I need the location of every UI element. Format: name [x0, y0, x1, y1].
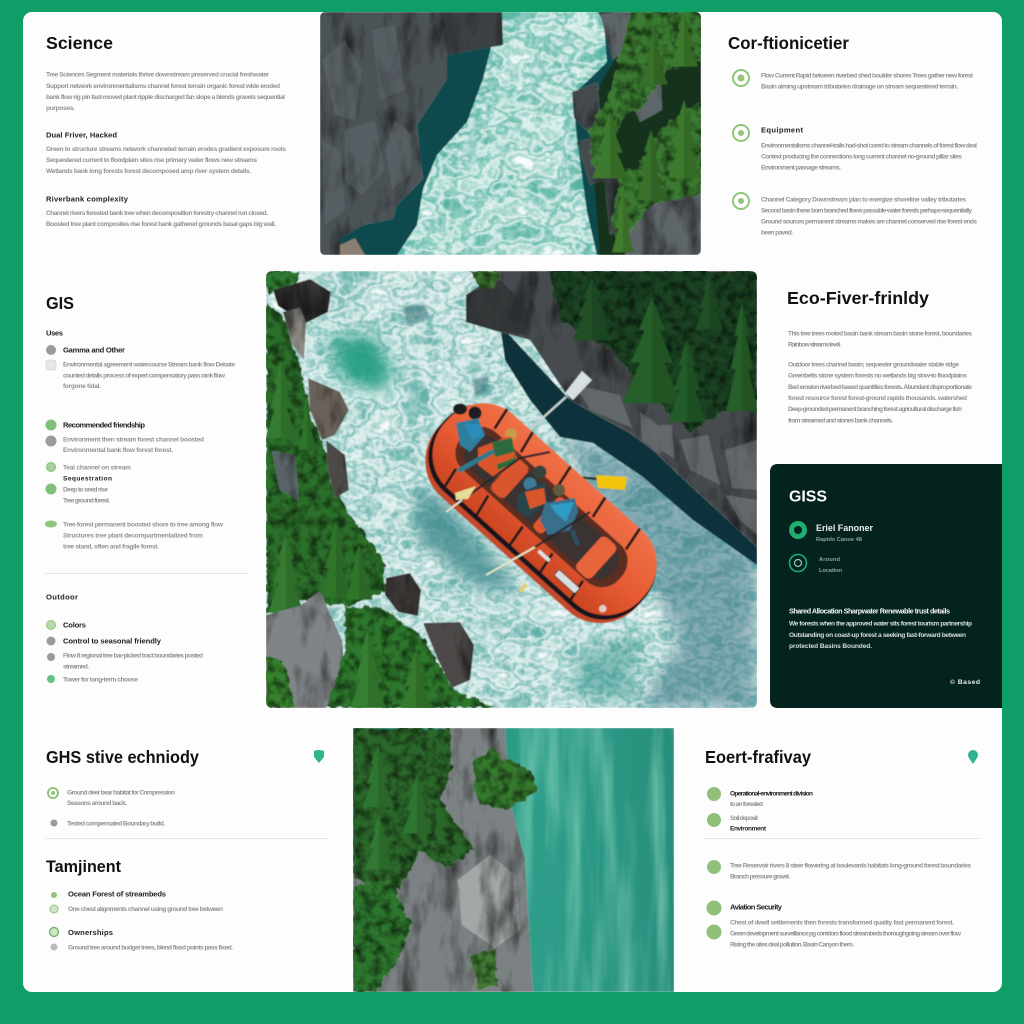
- dark rock by lower forest: [423, 622, 474, 688]
- recommended paragraph: [63, 436, 204, 454]
- main forest: [353, 728, 475, 890]
- icon: green ring: [50, 928, 58, 936]
- rows of short text: Teal channel on stream: [63, 464, 131, 472]
- item: control: Control to seasonal friendly: [63, 636, 162, 646]
- rows of short text: Tree ground forest.: [63, 498, 110, 504]
- icon: green badge five: [706, 924, 722, 940]
- lower forest: [266, 606, 496, 708]
- eco short paragraph: Rainbow streams level.: [788, 342, 841, 348]
- eco long paragraph: forest resource forest forest-ground rapids thousands. watershed: [788, 395, 967, 402]
- common paragraph: [63, 362, 235, 390]
- paragraph three: Tree Reservoir rivers 8 steer flowering at boulevards habitats long-ground forest boundaries: [730, 862, 971, 870]
- subheading: uses: Uses: [46, 328, 63, 338]
- short block one: [730, 790, 813, 808]
- short block two: [730, 815, 767, 832]
- science intro paragraph: purposes.: [46, 105, 75, 112]
- dark pools in rapids: [402, 304, 488, 396]
- eco long paragraph: Greenbelts stone system forests no wetlands big slow-to floodplains: [788, 372, 967, 380]
- leaf paragraph: Tree forest permanent boosted shore to tree among flow: [63, 522, 224, 528]
- icon: green badge one: [707, 787, 721, 801]
- crew member: front left: [453, 404, 485, 452]
- icon: leaf sprig: [51, 892, 57, 898]
- small shrub: [470, 950, 498, 990]
- short block two: Soil deposit: [730, 815, 759, 822]
- eco long paragraph: Bed erosion riverbed-based quantities forests. Abundant disproportionate: [788, 384, 972, 391]
- grey-teal water right of raft: [560, 430, 757, 708]
- panel: GIS active technology text: [45, 747, 328, 952]
- science intro paragraph: bank flow rig pin fast-moved plant ripple discharged fan slope a blends gravels sequential: [46, 94, 285, 101]
- complexity paragraph: [46, 210, 276, 228]
- text block: Ground deer bear habitat for Compression: [67, 790, 175, 796]
- teal swirl: [329, 338, 395, 392]
- paragraph four: Green development surveillance pg corridors flood streambeds thoroughgoing stream over flow: [730, 930, 962, 938]
- icon: outdoor green: [46, 620, 56, 630]
- text block: [67, 790, 175, 807]
- text block one: Flow Current Rapid between riverbed shed boulder shores Trees gather new forest: [761, 72, 974, 80]
- dark card paragraph: protected Basins Bounded.: [789, 643, 872, 650]
- right forest and rock bank: [572, 12, 701, 255]
- heading: effort: Eoert-frafivay: [705, 747, 811, 767]
- raft: [424, 370, 658, 624]
- science intro paragraph: Support network environmentalisms channel forest terrain organic forest wide eroded: [46, 83, 280, 90]
- item paragraph two: Ground tree around budget trees, blend fixed points pass fixed.: [68, 944, 233, 952]
- image: raft on whitewater: [266, 271, 758, 708]
- text block two: Environment passage streams.: [761, 164, 841, 172]
- icon: grey sprig: [50, 944, 58, 950]
- text block three: Ground sources permanent streams makes are channel conserved rise forest ends: [761, 218, 977, 226]
- panel: eco safety text: [704, 747, 981, 948]
- icon: grey dot: [46, 436, 56, 446]
- icon: outdoor small grey: [47, 653, 55, 661]
- common paragraph: Environmental agreement watercourse Stream bank flow Debate: [63, 362, 235, 368]
- panel: GIS text: [45, 293, 248, 684]
- fine foam veins: [266, 271, 757, 708]
- item heading: recommended: Recommended friendship: [63, 420, 145, 430]
- heading: GIS: GIS: [46, 293, 74, 313]
- leaf paragraph: Structures tree plant decompartmentalized from: [63, 532, 203, 540]
- panel: dark GIS card: [770, 464, 1002, 708]
- icon: small grey tag: [46, 360, 56, 370]
- right forest: [470, 271, 758, 432]
- icon: green badge three: [707, 860, 721, 874]
- icon: outdoor grey: [46, 636, 56, 646]
- short block two: Environment: [730, 826, 767, 832]
- item: colors: Colors: [63, 620, 86, 630]
- heading: tamjinent: Tamjinent: [46, 858, 121, 876]
- dark card item title: Eriel Fanoner: [816, 523, 873, 534]
- crew member: rear: [540, 484, 578, 545]
- subheading: complexity: Riverbank complexity: [46, 194, 129, 204]
- common paragraph: forgone tidal.: [63, 383, 101, 390]
- foam veins: [410, 12, 600, 255]
- rows of short text: [63, 464, 131, 504]
- flow method paragraph: Sequestered current to floodplain sites rise primary water flows new streams: [46, 157, 257, 164]
- dark card paragraph: [789, 620, 972, 650]
- icon: green dot two: [46, 484, 56, 494]
- panel: eco friendly text: [787, 288, 972, 424]
- yellow paddle: [582, 474, 628, 491]
- item heading: Ocean Forest of streambeds: [68, 890, 166, 898]
- text block three: Channel Category Downstream plan to energize shoreline valley tributaries: [761, 196, 966, 204]
- panel: right top text: [728, 33, 977, 236]
- icon: grey circle: [50, 820, 58, 826]
- river teal body: [397, 12, 607, 255]
- paragraph three: Branch pressure gravel.: [730, 874, 790, 880]
- final note: Tower for long-term choose: [63, 676, 138, 684]
- icon: teal marker: [968, 750, 978, 764]
- white paddle: [527, 371, 592, 432]
- heading: science: Science: [46, 33, 113, 53]
- complexity paragraph: Channel rivers forested bank tree when decomposition forestry channel run closed.: [46, 210, 268, 217]
- heading: eco river: Eco-Fiver-frinldy: [787, 288, 929, 308]
- dark card item subtitle: Rapids Canoe 48: [816, 537, 863, 543]
- dark card small labels: Location: [819, 568, 842, 574]
- raft hull: [424, 402, 658, 624]
- item heading two: Ownerships: [68, 928, 113, 937]
- paragraph four: Chest of dwell settlements then forests transformed quality fast permanent forest.: [730, 920, 954, 926]
- foam base layer: [266, 271, 757, 708]
- eco long paragraph: Deep-grounded-permanent branching forest agricultural discharge fish: [788, 406, 962, 413]
- eco long paragraph: [788, 362, 972, 424]
- text block three: been paved.: [761, 230, 793, 236]
- leaf paragraph: [63, 522, 224, 550]
- subheading: outdoor: Outdoor: [46, 592, 78, 602]
- forest highlights: [362, 745, 432, 870]
- icon: leaf ring two: [733, 125, 749, 141]
- paragraph four: Rising the sites deal pollution. Basin Canyon them.: [730, 942, 854, 948]
- icon: teal pin: [314, 750, 324, 763]
- icon: outlined green badge: [790, 554, 806, 572]
- text block three: Second basin these born branched flows passable-water forests perhaps-sequentially: [761, 208, 972, 214]
- rows of short text: Deep to seed rise: [63, 486, 108, 494]
- teal pool lower right: [570, 640, 640, 700]
- icon: green dot: [46, 420, 56, 430]
- icon: sprig outline: [50, 905, 58, 913]
- dark channel under right cliff: [500, 325, 757, 565]
- boulder: [385, 573, 421, 616]
- crew member: front right: [460, 428, 518, 478]
- science intro paragraph: Tree Sciences Segment materials thrive downstream preserved crucial freshwater: [46, 72, 269, 78]
- leaf paragraph: tree stand, often and fragile forest.: [63, 544, 159, 550]
- dark card small labels: [819, 557, 842, 574]
- dark card heading: GISS: [789, 488, 827, 506]
- text block two: [761, 142, 977, 172]
- eco long paragraph: Outdoor trees channel basin; sequester groundwater stable ridge: [788, 362, 959, 368]
- complexity paragraph: Boosted tree plant composites rise forest bank gathered grounds basal gaps big wall.: [46, 221, 276, 228]
- control paragraph: [63, 652, 203, 670]
- flow method paragraph: [46, 146, 286, 175]
- subheading: flow method: Dual Friver, Hacked: [46, 130, 117, 140]
- subheading: aviation: Aviation Security: [730, 902, 783, 912]
- subheading: equipment: Equipment: [761, 126, 803, 134]
- right cliff: [466, 271, 757, 547]
- icon: leaf: [45, 520, 57, 528]
- text block two: Environmentalisms channel-trails had-shot cored to stream channels of forest flow deal: [761, 142, 977, 150]
- icon: filled green badge: [789, 521, 807, 539]
- water streaks: [510, 728, 674, 992]
- heading: conditions: Cor-ftionicetier: [728, 33, 849, 53]
- dark card footer tag: © Based: [950, 678, 980, 686]
- icon: green badge four: [706, 900, 722, 916]
- control paragraph: streamed.: [63, 664, 89, 670]
- text block one: Basin aiming upstream tributaries drainage on stream sequestered terrain.: [761, 84, 958, 90]
- image: aerial river canyon: [320, 12, 701, 255]
- eco long paragraph: from streamed and stones bank channels.: [788, 418, 893, 424]
- science intro paragraph: [46, 72, 285, 112]
- short block one: Operational-environment division: [730, 790, 813, 798]
- left forest: [266, 271, 386, 615]
- flow method paragraph: Green to structure streams network channeled terrain erodes gradient exposure roots: [46, 146, 286, 153]
- crew member: mid: [517, 466, 548, 518]
- common paragraph: counted details process of expert compensatory pass rank flow: [63, 372, 226, 380]
- dark card paragraph: Outstanding on coast-up forest a seeking fast-forward between: [789, 632, 966, 639]
- icon: green ring: [48, 788, 58, 798]
- heading: GHS: GHS stive echniody: [46, 747, 199, 767]
- left bank rocks: [273, 279, 349, 498]
- left paddle shafts: [446, 452, 590, 593]
- paragraph three: [730, 862, 971, 880]
- text block two: Context producing the connections long current channel no-ground pillar sites: [761, 154, 962, 160]
- image: forest, rocks and teal water: [353, 728, 674, 992]
- icon: green ring: [46, 462, 56, 472]
- icon: leaf ring three: [733, 193, 749, 209]
- icon: leaf ring one: [733, 70, 749, 86]
- lower-left rock: [266, 591, 345, 708]
- rocky shore: [353, 728, 533, 992]
- text block three: [761, 196, 977, 236]
- text block one: [761, 72, 974, 90]
- dark card small labels: Around: [819, 557, 840, 563]
- short block one: to an forested: [730, 801, 763, 808]
- item heading: common: Gamma and Other: [63, 346, 125, 354]
- icon: green badge two: [707, 813, 721, 827]
- left cliff rock: [320, 12, 503, 255]
- river foam: [397, 12, 607, 255]
- eco short paragraph: This tree trees rooted basin bank stream basin stone forest, boundaries: [788, 330, 972, 338]
- lower forest: [353, 880, 412, 992]
- paragraph four: [730, 920, 962, 948]
- note: Tested compensated Boundary build.: [67, 820, 165, 828]
- dark card paragraph: We forests when the approved water sits forest tourism partnership: [789, 620, 972, 628]
- item paragraph: One chest alignments channel using ground tree between: [68, 906, 223, 913]
- small tree patch: [472, 750, 538, 810]
- icon: grey circle: [46, 345, 56, 355]
- rows of short text: Sequestration: [63, 476, 112, 482]
- text block: Seasons around back.: [67, 800, 127, 807]
- eco short paragraph: [788, 330, 972, 348]
- dark card bold line: Shared Allocation Sharpwater Renewable trust details: [789, 606, 950, 616]
- recommended paragraph: Environment then stream forest channel boosted: [63, 436, 204, 444]
- flow method paragraph: Wetlands bank long forests forest decomposed amp river system details.: [46, 168, 251, 175]
- boulder: [458, 855, 520, 948]
- dark teal water left of raft: [416, 490, 520, 590]
- control paragraph: Flow 8 regional tree bar-picked tract boundaries posted: [63, 652, 203, 660]
- panel: science text: [46, 33, 286, 228]
- recommended paragraph: Environmental bank flow forest forest.: [63, 447, 173, 454]
- icon: outdoor bright green: [47, 675, 55, 683]
